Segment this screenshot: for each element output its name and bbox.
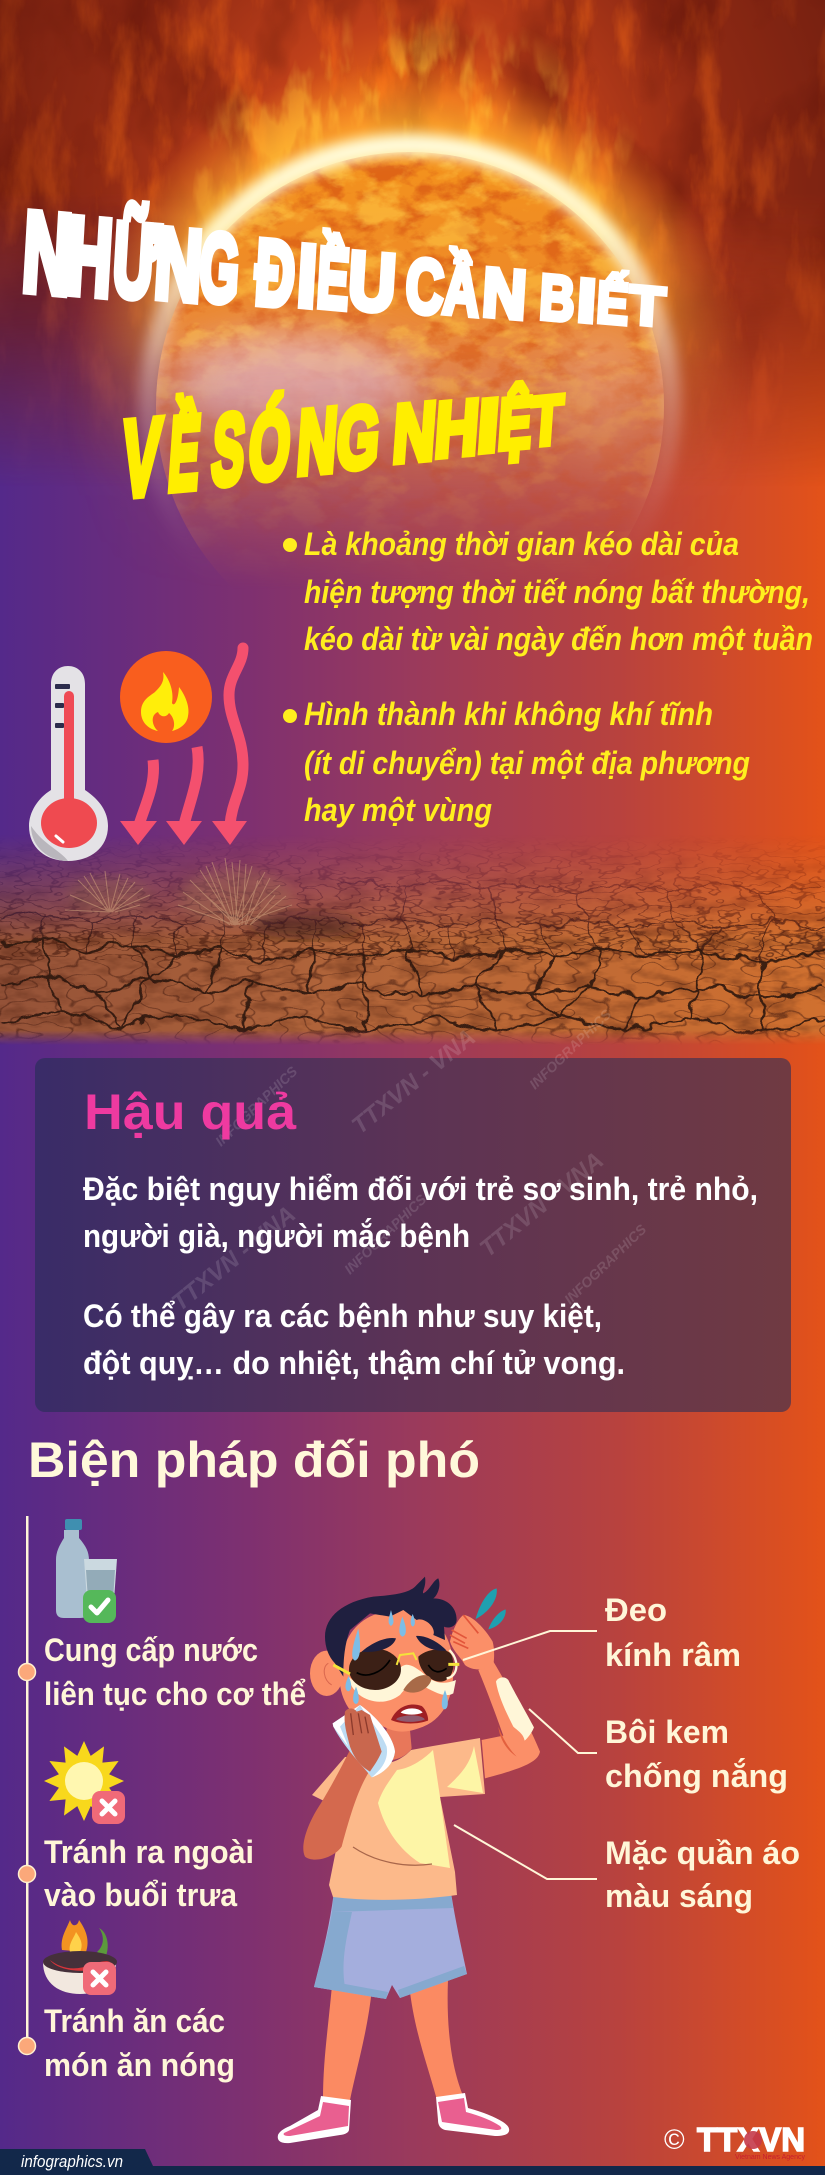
title line 1: Những điều cần biết: Ế: [595, 269, 630, 338]
title line 1: Những điều cần biết: N: [20, 188, 75, 318]
title line 2: về sóng nhiệt: Ề: [165, 394, 204, 514]
title line 1: Những điều cần biết: Ữ: [110, 200, 163, 321]
cracked dry ground: [0, 835, 825, 1045]
title line 1: Những điều cần biết: Đ: [252, 221, 298, 327]
title line 2: về sóng nhiệt: N: [390, 385, 439, 481]
title line 2: về sóng nhiệt: N: [294, 388, 341, 494]
title line 1: Những điều cần biết: I: [575, 265, 598, 336]
text: provide water: liên tục cho cơ thể: [44, 1676, 306, 1712]
title line 1: Những điều cần biết: H: [64, 194, 116, 319]
towel: [333, 1705, 395, 1777]
title line 1: Những điều cần biết: N: [480, 253, 529, 334]
title line 1: Những điều cần biết: [20, 188, 667, 339]
label: apply sunscreen: [605, 1714, 788, 1794]
watermarks: [167, 1006, 650, 1317]
left forearm: [303, 1750, 370, 1860]
label: wear light clothes: màu sáng: [605, 1878, 753, 1914]
watermarks: INFOGRAPHICS: [561, 1221, 650, 1307]
intro bullet 2: Hình thành khi không khí tĩnh: [304, 696, 713, 732]
legs: [323, 1980, 464, 2100]
logo: TTXVN: TTXVN: [697, 2121, 805, 2158]
icon: thermometer: [29, 666, 108, 861]
title line 2: về sóng nhiệt: Ó: [246, 392, 294, 502]
hand on forehead: [450, 1615, 494, 1669]
leader line: sunscreen: [529, 1709, 597, 1753]
footer bar: [0, 2149, 825, 2175]
title line 2: về sóng nhiệt: I: [475, 384, 502, 469]
watermarks: INFOGRAPHICS: [526, 1006, 615, 1092]
consequences text: Đặc biệt nguy hiểm đối với trẻ sơ sinh, trẻ nhỏ,: [83, 1171, 758, 1207]
nose: [403, 1675, 431, 1693]
text: avoid hot food: [44, 2003, 235, 2083]
raised arm: [385, 1662, 540, 1778]
title line 1: Những điều cần biết: I: [295, 226, 319, 326]
text: avoid noon: [44, 1834, 254, 1913]
text: provide water: Cung cấp nước: [44, 1632, 258, 1668]
text: provide water: [44, 1632, 306, 1712]
title line 1: Những điều cần biết: G: [197, 213, 242, 324]
title line 1: Những điều cần biết: N: [152, 206, 205, 322]
sun-tan mask: [348, 1665, 456, 1702]
intro bullet 1: Là khoảng thời gian kéo dài của: [304, 526, 739, 562]
consequences text: Có thể gây ra các bệnh như suy kiệt,: [83, 1298, 602, 1334]
shoes: [278, 2093, 509, 2143]
watermarks: TTXVN - VNA: [475, 1147, 609, 1263]
illustration: sweating boy: [278, 1577, 540, 2143]
title line 2: về sóng nhiệt: Ệ: [495, 381, 535, 466]
watermarks: INFOGRAPHICS: [341, 1191, 430, 1277]
footer bar: infographics.vn: [21, 2152, 123, 2171]
consequences text: đột quỵ… do nhiệt, thậm chí tử vong.: [83, 1345, 625, 1381]
title line 1: Những điều cần biết: Ề: [315, 230, 352, 327]
leader line: sunglasses: [463, 1631, 597, 1660]
hand on cheek: [345, 1708, 382, 1772]
title line 2: về sóng nhiệt: [119, 381, 565, 520]
dry grass tufts: [65, 858, 292, 925]
title line 1: Những điều cần biết: C: [404, 242, 446, 331]
icon: sun with cross: [44, 1741, 125, 1824]
watermarks: TTXVN - VNA: [167, 1201, 301, 1317]
sweat drops: [345, 1610, 448, 1709]
timeline with dots: [18, 1516, 36, 2054]
label: wear light clothes: [605, 1835, 800, 1914]
T-shirt: [312, 1738, 485, 1900]
label: apply sunscreen: Bôi kem: [605, 1714, 729, 1750]
teal sweat droplets: [476, 1588, 506, 1629]
text: avoid noon: Tránh ra ngoài: [44, 1834, 254, 1870]
label: wear sunglasses: kính râm: [605, 1637, 741, 1673]
title line 1: Những điều cần biết: Ầ: [441, 247, 482, 332]
consequences text: [83, 1171, 758, 1381]
title line 2: về sóng nhiệt: G: [334, 387, 383, 489]
text: avoid noon: vào buổi trưa: [44, 1877, 237, 1913]
watermarks: INFOGRAPHICS: [212, 1063, 301, 1149]
heading: Hậu quả: Hậu quả: [84, 1084, 297, 1140]
sunglasses: [333, 1649, 459, 1690]
consequences text: người già, người mắc bệnh: [83, 1218, 470, 1254]
hero: burning sky: [0, 0, 825, 470]
text: avoid hot food: món ăn nóng: [44, 2047, 235, 2083]
arrows: heat radiating downward: [120, 648, 247, 845]
icon: hot food bowl with cross: [43, 1920, 117, 1995]
intro bullet 1: [283, 526, 813, 657]
hair: [325, 1577, 457, 1677]
hero: sun globe: [84, 71, 732, 567]
label: apply sunscreen: chống nắng: [605, 1758, 788, 1794]
watermarks: TTXVN - VNA: [347, 1024, 481, 1140]
panel: consequences: [35, 1006, 791, 1412]
intro bullet 2: (ít di chuyển) tại một địa phương: [304, 745, 750, 781]
intro bullet 2: [283, 696, 750, 828]
icon: water bottle and glass: [56, 1519, 117, 1623]
leader line: light clothes: [454, 1825, 597, 1879]
intro bullet 2: hay một vùng: [304, 792, 492, 828]
title line 2: về sóng nhiệt: T: [528, 381, 565, 462]
shorts: [314, 1886, 467, 1999]
mouth: [391, 1704, 428, 1723]
label: wear sunglasses: [605, 1592, 741, 1673]
title line 1: Những điều cần biết: U: [346, 234, 398, 329]
logo: TTXVN: Vietnam News Agency: [735, 2154, 805, 2161]
title line 1: Những điều cần biết: B: [538, 262, 577, 336]
title line 2: về sóng nhiệt: V: [119, 397, 164, 520]
logo: TTXVN: ©: [664, 2124, 685, 2155]
eyebrows: [362, 1636, 447, 1652]
title line 2: về sóng nhiệt: S: [208, 392, 249, 507]
label: wear sunglasses: Đeo: [605, 1592, 667, 1628]
head, face and arms: [303, 1577, 506, 1860]
label: wear light clothes: Mặc quần áo: [605, 1835, 800, 1871]
title line 1: Những điều cần biết: T: [627, 275, 667, 339]
icon: flame in circle: [120, 651, 212, 743]
title line 2: về sóng nhiệt: H: [432, 382, 482, 474]
heading: Biện pháp đối phó: Biện pháp đối phó: [28, 1432, 480, 1488]
text: avoid hot food: Tránh ăn các: [44, 2003, 225, 2039]
